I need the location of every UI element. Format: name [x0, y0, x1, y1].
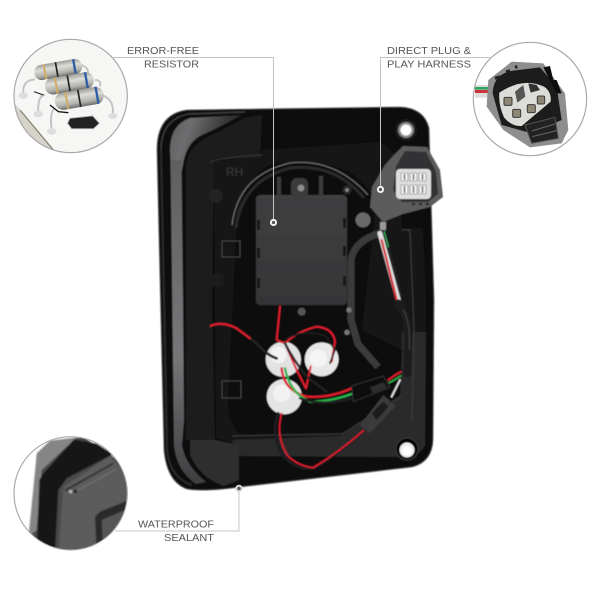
wires upper	[380, 232, 402, 300]
resistor bodies	[34, 58, 82, 80]
inset: harness connector	[470, 40, 590, 157]
lower plate	[232, 332, 426, 457]
connector	[370, 146, 443, 230]
harness sleeve	[398, 303, 408, 373]
RH marking: RH	[226, 165, 243, 179]
left dark panel	[186, 115, 262, 440]
callout: waterproof sealant: SEALANT	[164, 532, 215, 544]
chip	[68, 116, 99, 129]
hole: bottom right	[396, 438, 418, 460]
left light strip	[170, 160, 206, 484]
central cavity	[228, 161, 402, 434]
inset: resistor	[13, 38, 128, 154]
plug: lower	[360, 395, 396, 433]
callout: waterproof sealant: WATERPROOF	[138, 518, 214, 530]
callout: error-free resistor: ERROR-FREE	[127, 45, 199, 57]
rim highlight	[161, 112, 245, 150]
callout: direct plug and play harness: PLAY HARNESS	[387, 58, 471, 70]
hole: top right	[395, 119, 417, 141]
plug: center	[352, 376, 390, 402]
dark curve	[187, 114, 246, 165]
wires and LEDs lower	[211, 303, 410, 469]
resistor leads	[23, 65, 113, 130]
callout: error-free resistor: RESISTOR	[144, 58, 199, 70]
pins	[504, 96, 545, 117]
module box	[256, 176, 370, 305]
gray tube bracket	[351, 233, 380, 367]
arch	[232, 162, 368, 225]
lower left bezel panel	[190, 440, 239, 486]
LEDs	[264, 340, 340, 416]
callout: waterproof sealant	[115, 486, 242, 544]
side ribs	[222, 241, 241, 398]
callout: direct plug and play harness: DIRECT PLUG &	[387, 45, 471, 57]
callout: error-free resistor	[113, 45, 276, 225]
top left glow	[170, 115, 243, 175]
callout: direct plug and play harness	[378, 45, 490, 192]
inner plate	[214, 142, 426, 457]
tail light housing	[157, 107, 443, 490]
inset: waterproof sealant	[13, 436, 128, 551]
